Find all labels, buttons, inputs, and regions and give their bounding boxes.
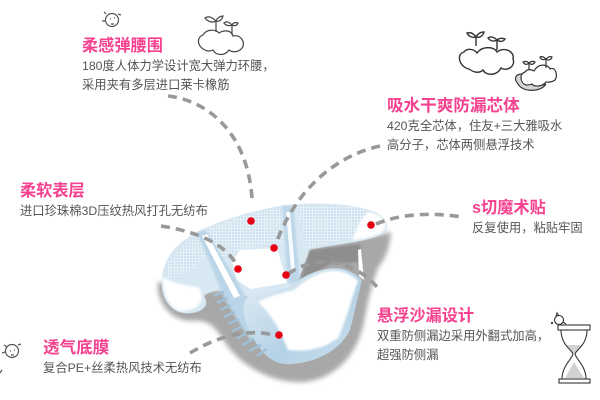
panel: back sheet: [43, 338, 202, 375]
ruffle: [214, 292, 267, 356]
mesh right: [296, 204, 372, 248]
heading: surface layer: 柔软表层: [20, 182, 85, 200]
text: waist band: 180度人体力学设计宽大弹力环腰，: [82, 59, 275, 73]
icon: hourglass with chick: [551, 313, 590, 383]
text: core: 420克全芯体，住友+三大雅吸水: [387, 119, 562, 133]
panel: side leak guard: [377, 306, 549, 362]
mesh left: [165, 236, 208, 276]
heading: back sheet: 透气底膜: [43, 338, 109, 357]
heading: side leak guard: 悬浮沙漏设计: [377, 307, 474, 325]
leader: side leak guard: [288, 262, 378, 288]
text: waist band: [82, 59, 275, 92]
interior shadow: [300, 244, 362, 282]
leader: waist band: [168, 96, 252, 198]
icon: large cloud top right: [459, 32, 514, 74]
markers: [234, 217, 375, 339]
text: side leak guard: 双重防侧漏边采用外翻式加高，: [377, 329, 549, 343]
text: back sheet: 复合PE+丝柔热风技术无纺布: [43, 361, 202, 375]
front flap: [244, 268, 362, 364]
icon: cloud with sprouts top centre: [198, 16, 243, 54]
left ear white: [163, 277, 202, 311]
panel: S-cut tab: [472, 198, 583, 235]
text: side leak guard: [377, 329, 549, 362]
leader: surface layer: [161, 226, 238, 268]
leader: back sheet: [190, 333, 278, 353]
heading: waist band: 柔感弹腰围: [82, 37, 163, 55]
icon: small cloud top right: [515, 57, 556, 90]
icon: doodle face top: [102, 12, 121, 26]
text: S-cut tab: 反复使用，粘贴牢固: [472, 221, 583, 235]
back waistband: [162, 203, 387, 313]
text: waist band: 采用夹有多层进口莱卡橡筋: [82, 78, 230, 92]
heading: core: 吸水干爽防漏芯体: [387, 96, 520, 115]
right tab white: [352, 212, 385, 240]
text: core: [387, 119, 562, 152]
text: core: 高分子，芯体两侧悬浮技术: [387, 138, 535, 152]
text: surface layer: 进口珍珠棉3D压纹热风打孔无纺布: [20, 204, 208, 218]
leader: core: [275, 146, 380, 246]
vertical strip: [282, 206, 300, 284]
mesh centre: [200, 207, 287, 260]
panel: surface layer: [20, 182, 208, 218]
outer shadow: [158, 232, 391, 382]
panel: waist band: [82, 36, 275, 92]
inner white area: [232, 248, 287, 289]
blue leg strip: [197, 230, 262, 340]
heading: S-cut tab: s切魔术贴: [472, 199, 546, 217]
icon: doodle face bottom left: [0, 344, 21, 373]
panel: core: [387, 96, 562, 152]
leader: S-cut tab: [376, 214, 462, 224]
text: side leak guard: 超强防侧漏: [377, 348, 438, 362]
